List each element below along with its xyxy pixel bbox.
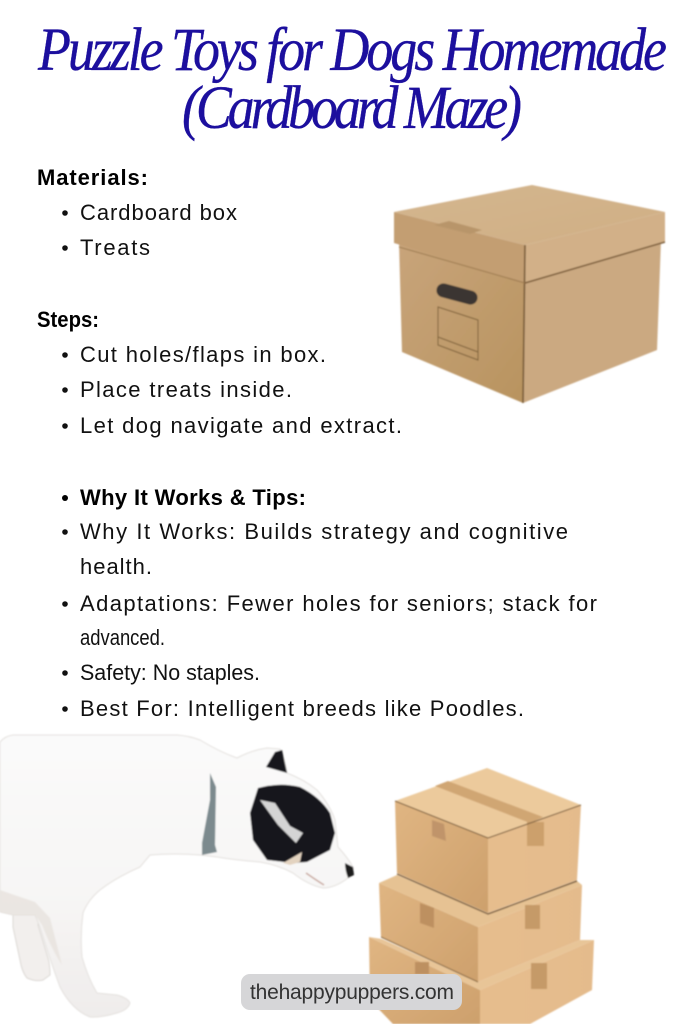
why it works and tips list: Adaptations: Fewer holes for seniors; stack for [80,591,597,616]
why it works and tips list: Safety: No staples. [80,660,260,685]
materials list: Cardboard box [80,200,237,225]
steps list: Place treats inside. [80,377,292,402]
materials list [62,200,237,260]
icon: archive cardboard box [394,185,665,403]
why it works and tips list: Best For: Intelligent breeds like Poodles. [80,696,524,721]
bottom box [369,937,594,1024]
steps heading: Steps: [37,307,99,332]
steps list: Cut holes/flaps in box. [80,342,326,367]
icon: stack of cardboard boxes [369,768,594,1024]
materials list: Treats [80,235,150,260]
why it works and tips list: Why It Works & Tips: [80,485,306,510]
why it works and tips list: advanced. [80,625,165,650]
why it works and tips list [62,485,597,721]
steps list: Let dog navigate and extract. [80,413,402,438]
website pill [241,974,462,1010]
why it works and tips list: health. [80,554,152,579]
title [37,15,667,142]
why it works and tips list: Why It Works: Builds strategy and cognitive [80,519,568,544]
title: Puzzle Toys for Dogs Homemade [37,15,667,84]
middle box [379,875,582,982]
icon: dog sniffing [0,735,354,1017]
materials heading: Materials: [37,165,148,190]
website pill: thehappypuppers.com [250,981,454,1004]
steps list [62,342,402,438]
top box [395,768,581,914]
title: (Cardboard Maze) [182,73,522,142]
